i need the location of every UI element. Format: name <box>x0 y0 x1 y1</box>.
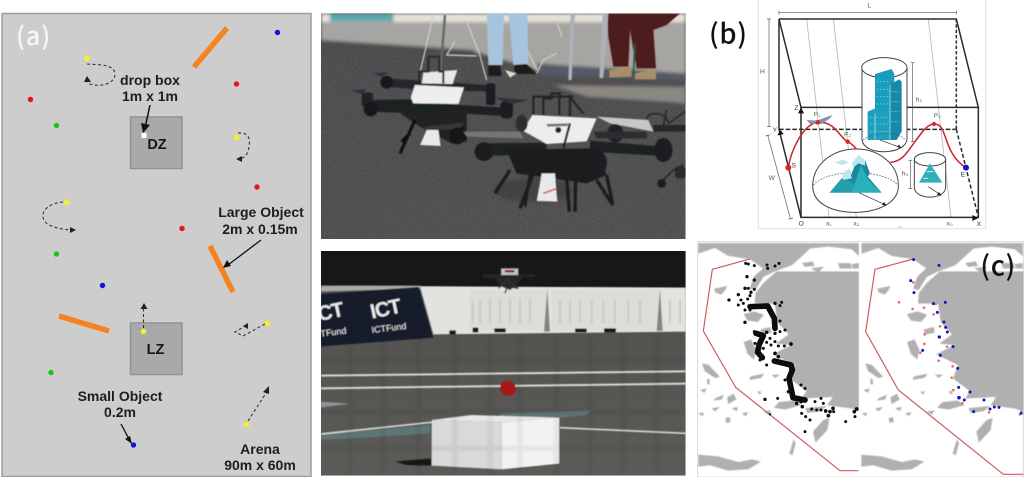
left map: dense black search points <box>727 262 858 433</box>
callout: large object <box>218 204 304 268</box>
waypoints <box>785 120 969 171</box>
person: dark trousers on tent frame <box>568 13 680 80</box>
right map land <box>859 242 1022 475</box>
panel a: arena map <box>2 14 311 476</box>
left map land <box>696 242 859 475</box>
operating area boundaries <box>703 259 1023 474</box>
axis and dimension labels: h₃ <box>902 170 908 177</box>
axis and dimension labels: r₁ <box>875 194 880 201</box>
light grid planes <box>807 19 951 217</box>
axis and dimension labels: P₂ <box>844 132 851 139</box>
axis and dimension labels: r₂ <box>894 141 899 148</box>
callout: small object: 0.2m <box>104 404 136 420</box>
panel b: 3D path planning diagram <box>709 0 986 229</box>
photo: two drones on asphalt <box>321 13 686 239</box>
landing zone <box>130 323 182 374</box>
heading: panel a label: (a) <box>16 17 51 53</box>
landing zone: LZ <box>147 342 164 358</box>
callout: large object: 2m x 0.15m <box>222 221 298 237</box>
right map: pink selected points <box>898 281 1021 416</box>
callout: drop box <box>120 72 180 133</box>
banner: ICTFund <box>311 326 347 340</box>
front drone <box>449 93 672 212</box>
scattered marker dots <box>28 30 280 448</box>
callout: arena size <box>224 441 296 473</box>
heading: panel b label: (b) <box>709 11 748 51</box>
large orange objects <box>59 28 233 331</box>
banner <box>311 287 433 346</box>
axis and dimension labels: T₂ <box>879 141 886 148</box>
axis and dimension labels: x₂ <box>853 221 860 228</box>
drop zone: DZ <box>147 137 167 153</box>
heading: panel c label: (c) <box>980 244 1016 284</box>
callout: small object: Small Object <box>78 388 163 404</box>
dimension lines <box>766 11 956 219</box>
axis and dimension labels: x₀ <box>947 221 953 228</box>
small cylinder with cone <box>914 153 946 197</box>
white barrier wall <box>321 286 686 334</box>
axis and dimension labels: X <box>977 221 982 228</box>
callout: large object: Large Object <box>218 204 304 220</box>
axis and dimension labels: P₁ <box>814 112 821 119</box>
axis and dimension labels: ... <box>897 222 903 229</box>
arena floor lines <box>321 371 686 434</box>
axis and dimension labels <box>760 2 982 229</box>
back drone <box>351 57 528 153</box>
axis and dimension labels: Y <box>773 127 778 134</box>
dome with mountain <box>813 149 898 212</box>
axis and dimension labels: S <box>792 162 797 169</box>
axis and dimension labels: W <box>769 175 776 182</box>
cables <box>421 15 562 80</box>
dashed motion paths <box>43 64 268 421</box>
callout: small object <box>78 388 163 444</box>
banner: ICT <box>311 298 347 327</box>
axis and dimension labels: Z <box>794 105 798 112</box>
photo: hovering drone above white box <box>311 251 686 476</box>
axis arrows <box>777 107 978 221</box>
axis and dimension labels: H <box>760 68 765 75</box>
cylinder with building <box>862 58 907 152</box>
right map: blue selected points <box>909 258 1022 414</box>
red ball <box>500 380 516 396</box>
panel c: coverage maps <box>696 242 1024 477</box>
planned trajectory <box>788 122 966 168</box>
axis and dimension labels: h₂ <box>916 96 922 103</box>
axis and dimension labels: P₀ <box>934 112 941 119</box>
axis and dimension labels: O <box>799 221 804 228</box>
vertical fence shadow grid <box>348 371 658 468</box>
drone icon on path <box>807 115 832 124</box>
drop zone <box>130 117 182 168</box>
cable clutter at right <box>647 110 686 183</box>
axis and dimension labels: T₃ <box>919 188 926 195</box>
white box <box>395 415 559 469</box>
axis and dimension labels: r₃ <box>936 184 941 191</box>
banner: ICTFund <box>371 321 407 335</box>
callout: drop box: 1m x 1m <box>122 88 178 104</box>
axis and dimension labels: T₁ <box>848 194 855 201</box>
callout: arena size: Arena <box>240 441 280 457</box>
axis and dimension labels: E <box>961 172 966 179</box>
callout: drop box: drop box <box>120 72 180 88</box>
arrowheads on motion paths <box>70 76 269 394</box>
hovering drone <box>483 268 535 293</box>
axis and dimension labels: L <box>867 2 871 9</box>
wireframe box <box>779 19 978 217</box>
banner: ICT <box>368 295 404 324</box>
axis and dimension labels: x₁ <box>826 221 832 228</box>
callout: arena size: 90m x 60m <box>224 457 296 473</box>
person: jeans <box>487 13 537 78</box>
